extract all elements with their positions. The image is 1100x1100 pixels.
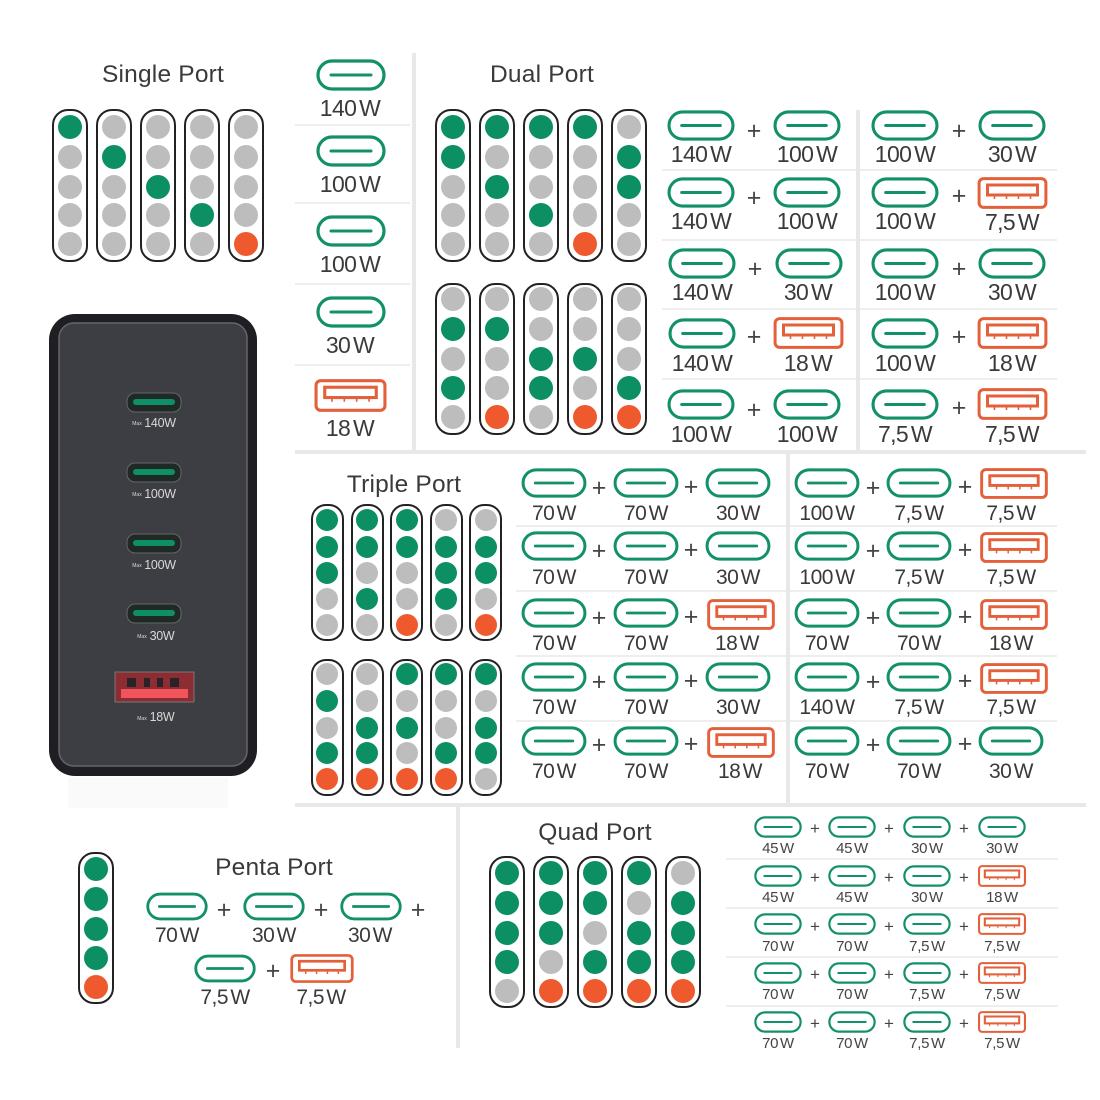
row: 70 W + 70 W + 7,5 W + 7,5 W: 70 W	[836, 938, 869, 955]
row: 70 W + 70 W + 30 W: 30 W	[716, 696, 761, 719]
row: 70 W + 70 W + 30 W: +	[684, 473, 698, 501]
pill: ports 2 3 4	[431, 505, 462, 640]
pill: ports 1 2 3 5	[534, 857, 568, 1007]
row: 70 W + 70 W + 7,5 W + 7,5 W: 70 W	[762, 938, 795, 955]
charger: five-port power adapter: Max	[132, 492, 142, 498]
row: 140 W + 30 W	[670, 250, 841, 305]
pill: port 2 active	[97, 110, 131, 261]
row: 100 W + 30 W: 100 W	[875, 141, 936, 167]
row: 100 W + 7,5 W + 7,5 W: +	[866, 537, 880, 565]
row: 45 W + 45 W + 30 W + 30 W: 30 W	[911, 840, 944, 857]
row: 140 W + 18 W: +	[747, 323, 761, 351]
row: 140 W + 18 W	[670, 319, 842, 376]
row: 140 W + 18 W: 18 W	[784, 350, 833, 376]
row: 70 W + 70 W + 18 W: 70 W	[532, 760, 577, 783]
pill: ports 1 and 4	[524, 110, 558, 261]
charger: five-port power adapter: 18W	[150, 710, 175, 724]
row: 140 W + 7,5 W + 7,5 W: +	[866, 668, 880, 696]
row: 45 W + 45 W + 30 W + 18 W: 30 W	[911, 889, 944, 906]
row: 70 W + 70 W + 30 W: +	[592, 537, 606, 565]
row: 100 W + 7,5 W + 7,5 W: 7,5 W	[986, 502, 1036, 525]
charger: five-port power adapter: Max	[132, 421, 142, 427]
row: 70 W + 70 W + 18 W	[796, 600, 1046, 655]
panel: triple port patterns	[312, 471, 501, 795]
row: 70 W + 70 W + 7,5 W + 7,5 W	[755, 963, 1025, 1003]
row: 140 W + 100 W: 140 W	[671, 141, 732, 167]
row: 100 W + 18 W: +	[952, 323, 966, 351]
charger: five-port power adapter: 100W	[144, 487, 176, 501]
charger: five-port power adapter: 30W	[150, 629, 175, 643]
row: 70 W + 70 W + 18 W: 70 W	[805, 632, 850, 655]
row: 70 W + 70 W + 18 W: 18 W	[715, 632, 760, 655]
row: 100 W + 100 W: +	[747, 396, 761, 424]
pill: ports 2 and 5	[480, 284, 514, 434]
row: 70 W + 70 W + 7,5 W + 7,5 W: +	[884, 965, 894, 984]
pill: ports 1 3 4 5	[622, 857, 656, 1007]
output: USB-A 18 W: 18 W	[326, 415, 375, 441]
pill: ports 1 and 2	[436, 110, 470, 261]
row: 100 W + 7,5 W + 7,5 W: 7,5 W	[894, 502, 944, 525]
row: 100 W + 7,5 W + 7,5 W: 100 W	[799, 502, 855, 525]
charger: five-port power adapter: Max	[132, 563, 142, 569]
row: 100 W + 7,5 W: +	[952, 182, 966, 210]
row: 70 W + 70 W + 18 W: 70 W	[624, 632, 669, 655]
row: 70 W + 70 W + 30 W: 30 W	[989, 760, 1034, 783]
row: 140 W + 100 W	[669, 112, 839, 167]
row: 70 W + 70 W + 30 W	[523, 533, 769, 589]
row: 100 W + 7,5 W + 7,5 W: +	[866, 474, 880, 502]
row: 7,5 W + 7,5 W: 7,5 W	[985, 421, 1040, 447]
row: 100 W + 100 W	[669, 391, 839, 447]
row: 70 W + 70 W + 18 W: 70 W	[624, 760, 669, 783]
pill: ports 3 and 4	[524, 284, 558, 434]
row: 45 W + 45 W + 30 W + 18 W: 45 W	[836, 889, 869, 906]
row: 70 W + 70 W + 7,5 W + 7,5 W: 70 W	[836, 986, 869, 1003]
pill: port 5 active	[229, 110, 263, 261]
pill: ports 1 3 4	[470, 660, 501, 795]
row: 45 W + 45 W + 30 W + 18 W: +	[959, 868, 969, 887]
row: 70 W + 70 W + 7,5 W + 7,5 W: +	[959, 917, 969, 936]
row: 7,5 W + 7,5 W: 7,5 W	[878, 421, 933, 447]
output: USB-C 140 W	[318, 61, 384, 121]
output: USB-C 30 W	[318, 298, 384, 358]
row: 70 W + 70 W + 30 W: 70 W	[624, 696, 669, 719]
row: 140 W + 30 W: +	[748, 255, 762, 283]
charger: five-port power adapter: 100W	[144, 558, 176, 572]
row: 70 W + 70 W + 30 W: +	[866, 731, 880, 759]
row: 70 W + 70 W + 7,5 W + 7,5 W: 7,5 W	[909, 986, 946, 1003]
output: USB-C 30 W: 30 W	[326, 332, 375, 358]
row: 100 W + 7,5 W: 7,5 W	[985, 209, 1040, 235]
panel: quad port outputs	[755, 817, 1025, 1052]
row: 45 W + 45 W + 30 W + 18 W	[755, 866, 1025, 906]
row: 70 W + 70 W + 30 W: 30 W	[716, 566, 761, 589]
row: 70 W + 70 W + 7,5 W + 7,5 W: +	[810, 1014, 820, 1033]
row: 70 W + 70 W + 30 W: +	[684, 536, 698, 564]
row: 140 W + 100 W: +	[747, 184, 761, 212]
row: 70 W + 70 W + 7,5 W + 7,5 W: 70 W	[836, 1035, 869, 1052]
pill: ports 1 4 5	[431, 660, 462, 795]
pill: port 1 active	[53, 110, 87, 261]
row: 100 W + 7,5 W + 7,5 W: 7,5 W	[986, 566, 1036, 589]
row: 140 W + 7,5 W + 7,5 W: 7,5 W	[986, 696, 1036, 719]
pill: ports 1 2 4	[352, 505, 383, 640]
row: 100 W + 30 W	[873, 250, 1044, 305]
row: 45 W + 45 W + 30 W + 30 W: +	[959, 819, 969, 838]
row: 100 W + 100 W: 100 W	[671, 421, 732, 447]
row: 100 W + 18 W: 100 W	[875, 350, 936, 376]
pill: ports 1 2 5	[391, 505, 422, 640]
row: 100 W + 18 W	[873, 319, 1046, 376]
charger: five-port power adapter: Max	[137, 634, 147, 640]
row: 70 W + 70 W + 7,5 W + 7,5 W: +	[959, 965, 969, 984]
row: 100 W + 30 W: 30 W	[988, 279, 1037, 305]
row: 7,5 W + 7,5 W: 7,5 W	[296, 986, 346, 1009]
output: USB-A 18 W	[316, 381, 385, 441]
row: 100 W + 7,5 W + 7,5 W	[796, 470, 1046, 525]
row: 45 W + 45 W + 30 W + 30 W	[755, 817, 1025, 857]
row: 45 W + 45 W + 30 W + 18 W: +	[884, 868, 894, 887]
panel: penta port	[79, 853, 425, 1009]
row: 100 W + 100 W: 100 W	[777, 421, 838, 447]
pill: ports 2 4 5	[312, 660, 343, 795]
heading: Quad Port: Quad Port	[538, 819, 652, 846]
charger: five-port power adapter: Max	[137, 716, 147, 722]
row: 70 W + 70 W + 30 W	[796, 728, 1042, 783]
row: 7,5 W + 7,5 W: 7,5 W	[200, 986, 250, 1009]
row: 70 W + 70 W + 30 W: 70 W	[805, 760, 850, 783]
charger: five-port power adapter	[49, 314, 257, 776]
row: 45 W + 45 W + 30 W + 18 W: 18 W	[986, 889, 1019, 906]
row: 140 W + 7,5 W + 7,5 W: 7,5 W	[894, 696, 944, 719]
pill: ports 2 and 4	[436, 284, 470, 434]
row: 100 W + 7,5 W + 7,5 W: +	[958, 536, 972, 564]
output: USB-C 100 W	[318, 217, 384, 277]
row: 100 W + 7,5 W + 7,5 W: 100 W	[799, 566, 855, 589]
row: 45 W + 45 W + 30 W + 30 W: 45 W	[836, 840, 869, 857]
pill: ports 1 2 4 5	[578, 857, 612, 1007]
row: 70 W + 70 W + 18 W: 70 W	[897, 632, 942, 655]
row: 70 W + 70 W + 7,5 W + 7,5 W: 7,5 W	[984, 986, 1021, 1003]
pill: ports 1 and 5	[568, 110, 602, 261]
pill: ports 4 and 5	[612, 284, 646, 434]
row: 70 W + 70 W + 7,5 W + 7,5 W: 7,5 W	[984, 938, 1021, 955]
pill: ports 3 and 5	[568, 284, 602, 434]
row: 140 W + 100 W: 140 W	[671, 208, 732, 234]
row: 70 W + 70 W + 30 W	[523, 470, 769, 525]
row: 45 W + 45 W + 30 W + 18 W: +	[810, 868, 820, 887]
row: 70 W + 70 W + 30 W: 30 W	[716, 502, 761, 525]
row: 7,5 W + 7,5 W: +	[266, 957, 280, 985]
row: 100 W + 7,5 W	[873, 179, 1046, 235]
row: 45 W + 45 W + 30 W + 30 W: 45 W	[762, 840, 795, 857]
row: 45 W + 45 W + 30 W + 30 W: +	[810, 819, 820, 838]
row: 70 W + 70 W + 7,5 W + 7,5 W: 7,5 W	[909, 938, 946, 955]
row: 70 W + 70 W + 7,5 W + 7,5 W: +	[810, 917, 820, 936]
row: 70 W + 70 W + 30 W	[523, 664, 769, 719]
row: 70 W + 70 W + 30 W: 70 W	[624, 502, 669, 525]
row: 70 W + 70 W + 18 W: +	[592, 604, 606, 632]
panel: dual port patterns	[436, 61, 646, 434]
row: 70 W + 30 W + 30 W +: 70 W	[155, 924, 200, 947]
panel: quad port patterns	[490, 819, 700, 1007]
output: USB-C 100 W: 100 W	[320, 171, 381, 197]
pill: ports 3 4 5	[352, 660, 383, 795]
row: 70 W + 70 W + 30 W: 70 W	[532, 566, 577, 589]
row: 70 W + 70 W + 7,5 W + 7,5 W: 7,5 W	[984, 1035, 1021, 1052]
row: 70 W + 70 W + 7,5 W + 7,5 W	[755, 914, 1025, 955]
row: 70 W + 70 W + 7,5 W + 7,5 W: +	[959, 1014, 969, 1033]
panel: single port outputs	[316, 61, 385, 441]
pill: port 3 active	[141, 110, 175, 261]
pill: all five ports	[79, 853, 113, 1003]
row: 100 W + 18 W: 18 W	[988, 350, 1037, 376]
row: 70 W + 70 W + 18 W: +	[866, 604, 880, 632]
heading: Triple Port: Triple Port	[347, 471, 461, 498]
panel: single port patterns	[53, 61, 263, 261]
row: 140 W + 100 W: +	[747, 117, 761, 145]
pill: port 4 active	[185, 110, 219, 261]
pill: ports 1 2 3 4	[490, 857, 524, 1007]
row: 70 W + 70 W + 30 W: 70 W	[897, 760, 942, 783]
row: 70 W + 30 W + 30 W +: +	[411, 896, 425, 924]
output: USB-C 100 W	[318, 137, 384, 197]
row: 45 W + 45 W + 30 W + 18 W: 45 W	[762, 889, 795, 906]
row: 140 W + 30 W: 140 W	[672, 279, 733, 305]
row: 70 W + 70 W + 18 W: +	[684, 603, 698, 631]
row: 7,5 W + 7,5 W: +	[952, 394, 966, 422]
row: 140 W + 7,5 W + 7,5 W: 140 W	[799, 696, 855, 719]
row: 70 W + 30 W + 30 W +	[148, 894, 425, 947]
row: 70 W + 70 W + 7,5 W + 7,5 W: 70 W	[762, 986, 795, 1003]
heading: Single Port: Single Port	[102, 61, 224, 88]
row: 140 W + 100 W	[669, 179, 839, 234]
row: 70 W + 30 W + 30 W +: 30 W	[348, 924, 393, 947]
row: 100 W + 7,5 W: 100 W	[875, 208, 936, 234]
row: 100 W + 30 W	[873, 112, 1044, 167]
row: 100 W + 7,5 W + 7,5 W: 7,5 W	[894, 566, 944, 589]
row: 70 W + 70 W + 18 W: +	[592, 731, 606, 759]
row: 70 W + 70 W + 7,5 W + 7,5 W: 70 W	[762, 1035, 795, 1052]
output: USB-C 140 W: 140 W	[320, 95, 381, 121]
row: 70 W + 70 W + 18 W: +	[684, 730, 698, 758]
row: 70 W + 70 W + 7,5 W + 7,5 W: +	[884, 1014, 894, 1033]
panel: triple port outputs right	[796, 470, 1046, 783]
row: 140 W + 100 W: 100 W	[777, 208, 838, 234]
row: 70 W + 70 W + 18 W	[523, 600, 773, 655]
pill: ports 1 2 3	[312, 505, 343, 640]
panel: triple port outputs left	[523, 470, 773, 783]
row: 100 W + 30 W: 30 W	[988, 141, 1037, 167]
output: USB-C 100 W: 100 W	[320, 251, 381, 277]
row: 70 W + 30 W + 30 W +: +	[314, 896, 328, 924]
row: 70 W + 30 W + 30 W +: 30 W	[252, 924, 297, 947]
row: 70 W + 70 W + 7,5 W + 7,5 W	[755, 1012, 1025, 1052]
row: 70 W + 70 W + 30 W: +	[592, 668, 606, 696]
row: 100 W + 30 W: +	[952, 117, 966, 145]
charger: five-port power adapter: 140W	[144, 416, 176, 430]
row: 70 W + 70 W + 30 W: +	[592, 474, 606, 502]
row: 70 W + 70 W + 30 W: 70 W	[532, 696, 577, 719]
row: 140 W + 100 W: 100 W	[777, 141, 838, 167]
row: 7,5 W + 7,5 W	[196, 955, 352, 1009]
row: 70 W + 70 W + 18 W: +	[958, 603, 972, 631]
row: 70 W + 70 W + 30 W: +	[684, 667, 698, 695]
row: 7,5 W + 7,5 W	[873, 390, 1046, 447]
pill: ports 2 3 4 5	[666, 857, 700, 1007]
row: 45 W + 45 W + 30 W + 30 W: 30 W	[986, 840, 1019, 857]
row: 70 W + 70 W + 18 W	[523, 728, 773, 783]
pill: ports 2 and 3	[612, 110, 646, 261]
pill: ports 2 3 5	[470, 505, 501, 640]
row: 140 W + 7,5 W + 7,5 W: +	[958, 667, 972, 695]
heading: Penta Port: Penta Port	[215, 854, 333, 881]
row: 70 W + 70 W + 30 W: 70 W	[624, 566, 669, 589]
row: 100 W + 7,5 W + 7,5 W: +	[958, 473, 972, 501]
row: 140 W + 7,5 W + 7,5 W	[796, 664, 1046, 719]
panel: dual port outputs	[669, 112, 1046, 447]
heading: Dual Port: Dual Port	[490, 61, 594, 88]
row: 70 W + 70 W + 7,5 W + 7,5 W: 7,5 W	[909, 1035, 946, 1052]
row: 70 W + 70 W + 7,5 W + 7,5 W: +	[810, 965, 820, 984]
row: 70 W + 70 W + 18 W: 18 W	[718, 760, 763, 783]
row: 140 W + 30 W: 30 W	[784, 279, 833, 305]
row: 100 W + 30 W: +	[952, 255, 966, 283]
row: 70 W + 70 W + 30 W: 70 W	[532, 502, 577, 525]
row: 70 W + 70 W + 18 W: 18 W	[989, 632, 1034, 655]
row: 100 W + 30 W: 100 W	[875, 279, 936, 305]
row: 140 W + 18 W: 140 W	[672, 350, 733, 376]
row: 70 W + 70 W + 18 W: 70 W	[532, 632, 577, 655]
row: 45 W + 45 W + 30 W + 30 W: +	[884, 819, 894, 838]
row: 70 W + 30 W + 30 W +: +	[217, 896, 231, 924]
row: 70 W + 70 W + 7,5 W + 7,5 W: +	[884, 917, 894, 936]
row: 100 W + 7,5 W + 7,5 W	[796, 533, 1046, 589]
pill: ports 1 3 5	[391, 660, 422, 795]
pill: ports 1 and 3	[480, 110, 514, 261]
row: 70 W + 70 W + 30 W: +	[958, 730, 972, 758]
